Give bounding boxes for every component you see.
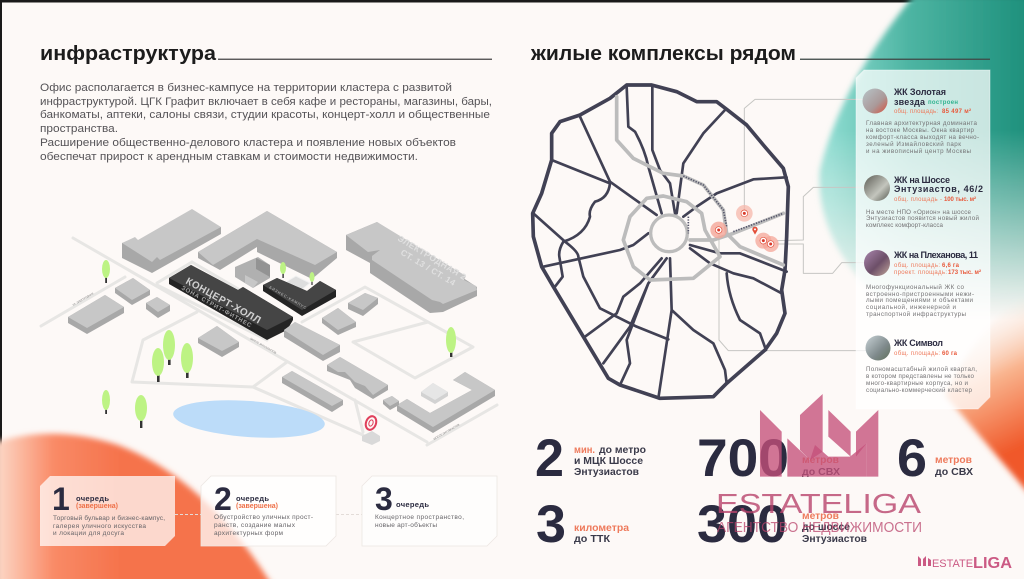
building: business campus dark: [263, 278, 336, 316]
complex: Simvol: [866, 336, 977, 394]
watermark: Estateliga: АГЕНТСТВО НЕДВИЖИМОСТИ: [717, 520, 922, 536]
complex: Plekhanova 11: ЖК на Плеханова, 11: [893, 250, 978, 260]
building: concert hall: КОНЦЕРТ-ХОЛЛ: [184, 276, 262, 326]
callout connector lines: [719, 99, 867, 351]
complex: Shosse Entuziastov 46/2: 100 тыс. м²: [944, 196, 976, 203]
complex: Plekhanova 11: общ. площадь:: [894, 263, 940, 269]
card: phase 1: [40, 476, 175, 546]
small plaza: [286, 276, 310, 291]
card: phase 1: очередь: [76, 494, 109, 503]
corner logo: [918, 555, 1012, 572]
stat: 2 min to metro: Энтузиастов: [574, 466, 640, 478]
trees: [102, 260, 456, 428]
complex: Plekhanova 11: проект. площадь:: [894, 270, 947, 276]
roads: [41, 238, 497, 445]
crown logo: [760, 394, 878, 477]
complex: Zolotaya Zvezda: 85 497 м²: [942, 108, 971, 115]
complex: Zolotaya Zvezda: общ. площадь:: [894, 109, 938, 115]
complex: Zolotaya Zvezda: зеленый Измайловский парк: [866, 141, 961, 148]
complex: Simvol: 60 га: [942, 351, 958, 357]
text block: infrastructure description: банкоматы, аптеки, салоны связи, студии красоты, концерт-холл и общественные: [40, 109, 490, 121]
text block: infrastructure description: обеспечат прирост к арендным ставкам и стоимости недвижимости.: [40, 151, 418, 163]
card: phase 2: (завершена): [236, 503, 278, 510]
text block: infrastructure description: пространства.: [40, 123, 118, 135]
stat: 2 min to metro: [535, 429, 646, 488]
stat: 300 m: [697, 495, 868, 554]
complex: Zolotaya Zvezda: ЖК Золотая: [893, 87, 946, 97]
card: phase 2: ранств, создание малых: [214, 522, 296, 529]
text block: infrastructure description: Офис располагается в бизнес-кампусе на территории кластера с развитой: [40, 82, 452, 94]
corner logo: ESTATE: [932, 558, 973, 570]
roads: ШОССЕ ЭНТУЗИАСТОВ: [432, 422, 460, 441]
text block: infrastructure description: инфраструктурой. ЦГК Графит включает в себя кафе и рестораны, магазины, бары,: [40, 96, 492, 108]
complex: Zolotaya Zvezda: и на живописный центр Москвы: [866, 148, 972, 155]
panel: nearby residential complexes: [856, 70, 990, 409]
stat: 300 m: метров: [802, 510, 840, 522]
complex: Simvol: социально-коммерческий кластер: [866, 387, 973, 394]
watermark: Estateliga: [716, 394, 922, 536]
heading: infrastructure: инфраструктура: [40, 43, 217, 65]
stat: 2 min to metro: до метро: [599, 444, 646, 456]
card: phase 2: Обустройство уличных прост-: [214, 513, 313, 521]
card: phase 1: и локации для досуга: [53, 530, 124, 537]
complex: Shosse Entuziastov 46/2: ЖК на Шоссе: [893, 175, 950, 185]
stat: 3 km: километра: [574, 522, 629, 534]
complex: Plekhanova 11: Многофункциональный ЖК со: [866, 284, 965, 291]
text block: infrastructure description: Расширение общественно-делового кластера и появление новых объектов: [40, 137, 456, 149]
complex: Shosse Entuziastov 46/2: Энтузиастов, 46/2: [894, 184, 983, 194]
card: phase 3: [362, 476, 497, 546]
card: phase 2: [201, 476, 336, 546]
roads: УЛ. ЭЛЕКТРОДНАЯ: [72, 291, 94, 307]
stat: 2 min to metro: 2: [535, 429, 564, 488]
stat: 6 m: 6: [897, 429, 927, 488]
stat: 700 m: [697, 429, 840, 488]
orange corner gradient: [945, 290, 1024, 495]
card: phase 2: очередь: [236, 494, 269, 503]
complex: Zolotaya Zvezda: комфорт-класса выходят на вечно-: [866, 134, 979, 141]
corner logo: LIGA: [973, 555, 1012, 572]
stat: 700 m: до СВХ: [802, 466, 840, 478]
complex: Simvol: общ. площадь:: [894, 351, 940, 357]
text block: infrastructure description: [40, 82, 492, 163]
building: courtyard block: [235, 257, 270, 288]
complex: Plekhanova 11: транспортной инфраструктуры: [866, 311, 967, 318]
complex: Zolotaya Zvezda: звезда: [894, 97, 926, 107]
complex: Zolotaya Zvezda: построен: [928, 100, 958, 106]
stat: 3 km: до ТТК: [574, 533, 611, 545]
card: phase 1: галерея уличного искусства: [53, 523, 146, 530]
card: phase 1: 1: [52, 481, 70, 517]
complex: Shosse Entuziastov 46/2: На месте НПО «Орион» на шоссе: [866, 209, 972, 216]
complex: Simvol: много-квартирные корпуса, но и: [866, 380, 969, 387]
building: U block: [198, 211, 337, 279]
stat: 300 m: 300: [697, 495, 787, 554]
roads: ШОССЕ ЭНТУЗИАСТОВ: [250, 336, 277, 355]
inner rings and rail lines: [617, 97, 783, 280]
card: phase 2: архитектурных форм: [214, 530, 284, 537]
complex: Plekhanova 11: 6,6 га: [942, 263, 960, 269]
building: concert hall: ЗОНА СТРИТ-ФИТНЕС: [180, 286, 253, 329]
stat: 700 m: 700: [697, 429, 789, 488]
heading: nearby complexes: жилые комплексы рядом: [530, 43, 796, 65]
orange bottom-left blob: [0, 434, 272, 579]
card: phase 3: очередь: [396, 500, 429, 509]
card: phase 1: Торговый бульвар и бизнес-кампус,: [53, 514, 165, 522]
complex: Plekhanova 11: социальной, инженерной и: [866, 304, 957, 311]
card: phase 1: (завершена): [76, 503, 118, 510]
complex: Zolotaya Zvezda: Главная архитектурная доминанта: [866, 120, 978, 127]
lake: [172, 396, 326, 442]
building: north long block: [122, 209, 221, 273]
radial roads: [533, 87, 787, 398]
stat: 6 m: метров: [935, 454, 973, 466]
complex: Zolotaya Zvezda: [862, 87, 979, 155]
teal corner gradient: [820, 0, 1024, 345]
dashed link: [175, 514, 362, 516]
complex: Plekhanova 11: встроенно-пристроенными нежи-: [866, 291, 974, 298]
building: concert hall: [169, 265, 293, 340]
stat: 2 min to metro: мин.: [574, 444, 595, 456]
Moscow road map: [533, 85, 867, 398]
complex: Zolotaya Zvezda: на востоке Москвы. Окна квартир: [866, 127, 975, 134]
building: Elektrodnaya 2: СТ. 13 / СТ. 14: [399, 247, 457, 288]
stat: 6 m: [897, 429, 973, 488]
complex: Shosse Entuziastov 46/2: Энтузиастов появится новый жилой: [866, 215, 980, 222]
outer ring road: [533, 85, 788, 398]
stat: 700 m: метров: [802, 454, 840, 466]
card: phase 3: Концертное пространство,: [375, 514, 464, 521]
card: phase 2: 2: [214, 481, 232, 517]
stat: 3 km: 3: [536, 495, 566, 554]
stat: 300 m: до шоссе: [802, 521, 850, 533]
complex: Plekhanova 11: лыми помещениями и объектами: [866, 297, 974, 304]
complex: Simvol: в котором представлены не только: [866, 373, 975, 380]
complex: Simvol: ЖК Символ: [893, 338, 943, 348]
stat: 6 m: до СВХ: [935, 466, 973, 478]
complex: Plekhanova 11: 173 тыс. м²: [948, 269, 981, 276]
complex: Shosse Entuziastov 46/2: общ. площадь -: [894, 197, 942, 203]
location markers: [710, 205, 779, 252]
icon: metro pin: [362, 415, 380, 445]
complex: Shosse Entuziastov 46/2: [864, 175, 983, 229]
stat: 2 min to metro: и МЦК Шоссе: [574, 455, 643, 467]
stat: 300 m: Энтузиастов: [802, 533, 868, 545]
card: phase 3: 3: [375, 481, 393, 517]
stat: 3 km: [536, 495, 629, 554]
complex: Shosse Entuziastov 46/2: комплекс комфорт-класса: [866, 222, 944, 229]
isometric campus map: [41, 209, 497, 445]
complex: Simvol: Полномасштабный жилой квартал,: [866, 366, 977, 373]
small buildings: [68, 278, 495, 433]
card: phase 3: новые арт-объекты: [375, 521, 437, 529]
watermark: Estateliga: ESTATELIGA: [716, 488, 921, 519]
building: Elektrodnaya 2: [346, 222, 477, 313]
complex: Plekhanova 11: [864, 250, 981, 318]
building: Elektrodnaya 2: ЭЛЕКТРОДНАЯ 2: [396, 233, 468, 282]
building: business campus dark: БИЗНЕС-КАМПУС: [268, 285, 307, 310]
